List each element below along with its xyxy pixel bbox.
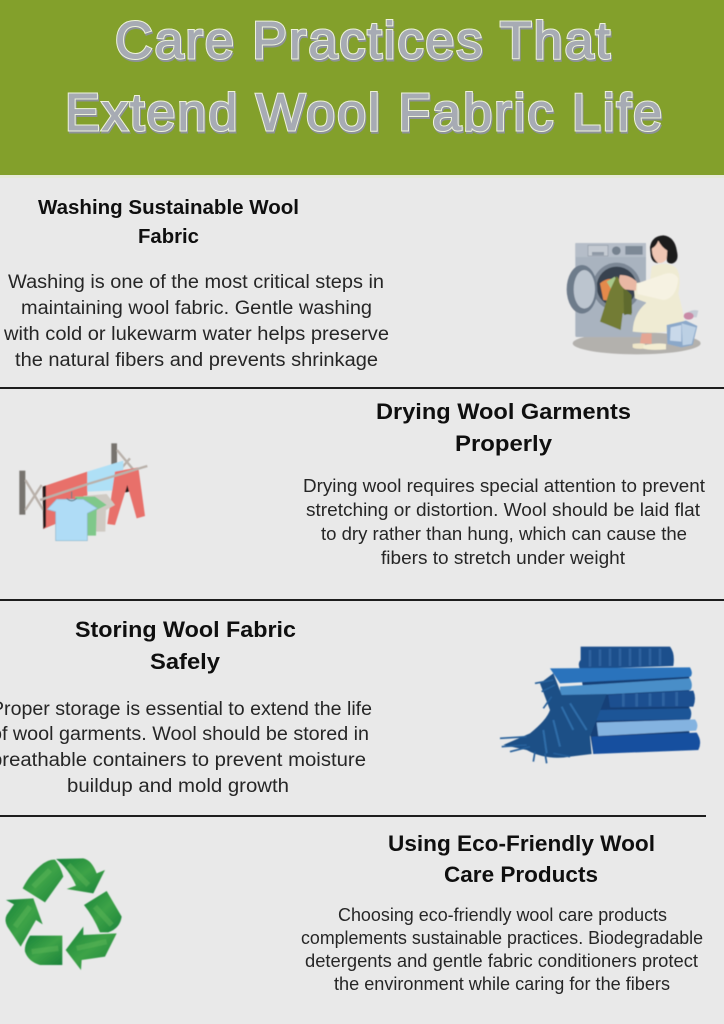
text block: washing: maintaining wool fabric. Gentle washing: [21, 298, 372, 319]
icon: stack of blue wool scarves: [500, 647, 700, 763]
text block: drying: stretching or distortion. Wool should be laid flat: [306, 500, 700, 520]
text block: washing: [3, 272, 389, 371]
heading: eco-friendly products: Using Eco-Friendly Wool: [388, 831, 655, 856]
text block: drying: to dry rather than hung, which can cause the: [321, 524, 687, 544]
text block: storing: buildup and mold growth: [67, 776, 289, 797]
heading: storing: Storing Wool Fabric: [75, 617, 296, 642]
divider: [0, 599, 724, 601]
divider: [0, 387, 724, 389]
text block: eco-friendly products: complements sustainable practices. Biodegradable: [301, 928, 703, 948]
icon: woman at washing machine: [567, 235, 701, 354]
text block: washing: the natural fibers and prevents shrinkage: [15, 350, 378, 371]
heading: drying: Drying Wool Garments: [376, 399, 631, 424]
header banner: [0, 0, 724, 178]
heading: eco-friendly products: Care Products: [444, 862, 598, 887]
heading: eco-friendly products: [388, 831, 655, 887]
title: Extend Wool Fabric Life: [65, 84, 662, 142]
text block: drying: [303, 476, 705, 568]
icon: drying rack: [19, 443, 147, 541]
heading: washing: [38, 196, 299, 248]
panel: storing: [0, 617, 700, 797]
title: Care Practices That: [116, 14, 612, 72]
heading: drying: Properly: [455, 431, 553, 456]
text block: eco-friendly products: detergents and gentle fabric conditioners protect: [305, 951, 698, 971]
heading: storing: Safely: [150, 649, 221, 674]
text block: drying: Drying wool requires special attention to prevent: [303, 476, 705, 496]
title: Extend Wool Fabric Life: [66, 86, 663, 144]
text block: eco-friendly products: the environment while caring for the fibers: [334, 974, 670, 994]
title: Care Practices That: [115, 12, 611, 70]
title: Extend Wool Fabric Life: [65, 84, 662, 142]
text block: storing: [0, 699, 372, 797]
title: [65, 12, 663, 144]
panel: drying: [19, 399, 705, 568]
text block: washing: Washing is one of the most critical steps in: [8, 272, 384, 293]
text block: eco-friendly products: [301, 905, 703, 994]
text block: washing: with cold or lukewarm water helps preserve: [3, 324, 389, 345]
heading: drying: [376, 399, 631, 456]
heading: washing: Fabric: [138, 225, 199, 248]
icon: recycling symbol: [5, 858, 122, 970]
text block: storing: Proper storage is essential to extend the life: [0, 699, 372, 720]
heading: storing: [75, 617, 296, 674]
panel: eco-friendly products: [5, 831, 703, 994]
text block: eco-friendly products: Choosing eco-friendly wool care products: [338, 905, 667, 925]
text block: storing: breathable containers to prevent moisture: [0, 750, 366, 771]
heading: washing: Washing Sustainable Wool: [38, 196, 299, 219]
text block: drying: fibers to stretch under weight: [381, 548, 625, 568]
panel: washing: [3, 196, 701, 371]
title: Care Practices That: [115, 12, 611, 70]
text block: storing: of wool garments. Wool should be stored in: [0, 724, 369, 745]
divider: [0, 815, 706, 817]
